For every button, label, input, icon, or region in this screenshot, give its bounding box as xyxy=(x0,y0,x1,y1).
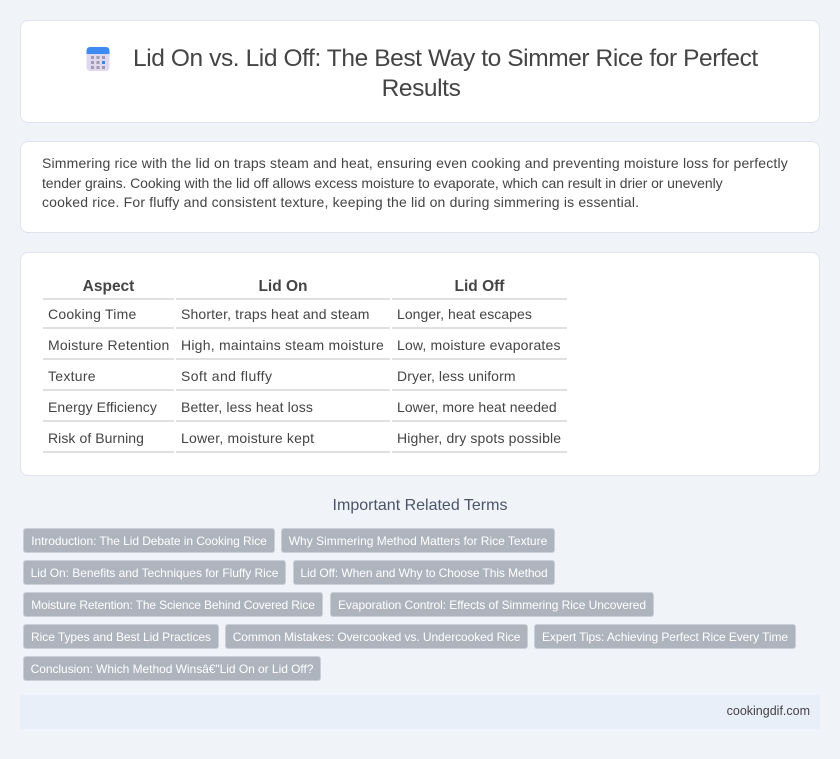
comparison table: Lower, more heat needed xyxy=(397,399,557,415)
related terms tags: Rice Types and Best Lid Practices xyxy=(31,630,211,644)
related terms tags: Evaporation Control: Effects of Simmering Rice Uncovered xyxy=(338,598,646,612)
title panel xyxy=(20,20,820,123)
comparison table: Low, moisture evaporates xyxy=(397,337,561,353)
intro text: cooked rice. For fluffy and consistent texture, keeping the lid on during simmering is essential. xyxy=(42,194,639,210)
related terms tags: Lid Off: When and Why to Choose This Method xyxy=(300,566,548,580)
icon: calendar xyxy=(86,47,110,71)
related terms tags: Introduction: The Lid Debate in Cooking Rice xyxy=(31,534,267,548)
comparison table: Lid Off xyxy=(455,278,504,295)
related terms tags: Conclusion: Which Method Winsâ€"Lid On or Lid Off? xyxy=(31,662,313,676)
comparison table: Moisture Retention xyxy=(48,337,169,353)
footer source: cookingdif.com xyxy=(727,704,810,718)
related terms tags xyxy=(23,528,796,681)
comparison table: Shorter, traps heat and steam xyxy=(181,306,370,322)
comparison table: Texture xyxy=(48,368,96,384)
related terms tags: Moisture Retention: The Science Behind Covered Rice xyxy=(31,598,315,612)
intro text: tender grains. Cooking with the lid off allows excess moisture to evaporate, which can result in drier or unevenly xyxy=(42,174,722,190)
related terms tags: Lid On: Benefits and Techniques for Fluffy Rice xyxy=(31,566,278,580)
comparison table: Longer, heat escapes xyxy=(397,306,532,322)
comparison table: Soft and fluffy xyxy=(181,368,272,384)
comparison table: Lid On xyxy=(258,278,308,295)
intro text xyxy=(42,155,788,210)
footer bar xyxy=(20,695,820,729)
comparison table: Cooking Time xyxy=(48,306,137,322)
intro panel xyxy=(20,141,820,233)
table panel xyxy=(20,252,820,476)
comparison table: High, maintains steam moisture xyxy=(181,337,384,353)
title: Lid On vs. Lid Off: The Best Way to Simmer Rice for Perfect xyxy=(133,45,758,72)
comparison table: Better, less heat loss xyxy=(181,399,313,415)
title xyxy=(133,45,758,102)
comparison table: Higher, dry spots possible xyxy=(397,430,561,446)
comparison table: Dryer, less uniform xyxy=(397,368,516,384)
related terms tags: Common Mistakes: Overcooked vs. Undercooked Rice xyxy=(233,630,520,644)
comparison table: Risk of Burning xyxy=(48,430,144,446)
related terms tags: Why Simmering Method Matters for Rice Texture xyxy=(289,534,547,548)
comparison table: Lower, moisture kept xyxy=(181,430,314,446)
title: Results xyxy=(382,74,460,102)
related terms tags: Expert Tips: Achieving Perfect Rice Every Time xyxy=(542,630,788,644)
intro text: Simmering rice with the lid on traps steam and heat, ensuring even cooking and preventing moisture loss for perfectly xyxy=(42,155,788,171)
comparison table: Aspect xyxy=(83,278,134,295)
comparison table xyxy=(43,278,567,453)
related terms heading: Important Related Terms xyxy=(333,497,507,514)
comparison table: Energy Efficiency xyxy=(48,399,157,415)
